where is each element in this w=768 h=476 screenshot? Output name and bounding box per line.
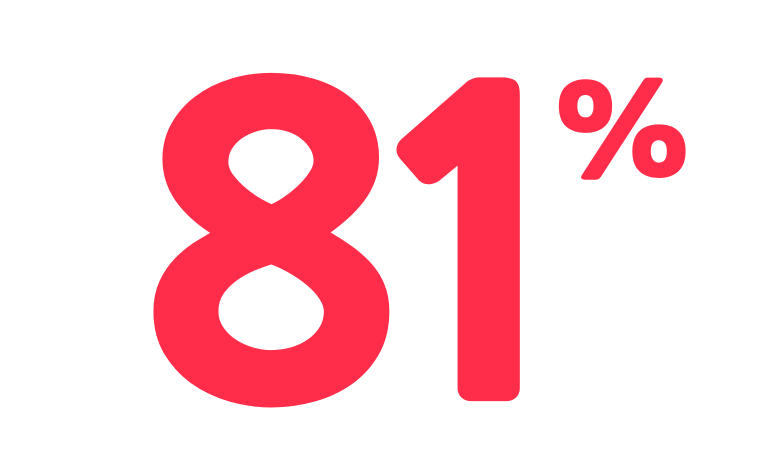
- percent sign: %: [545, 73, 700, 194]
- digit 1: 1: [350, 52, 608, 452]
- digit 8: 8: [139, 50, 400, 456]
